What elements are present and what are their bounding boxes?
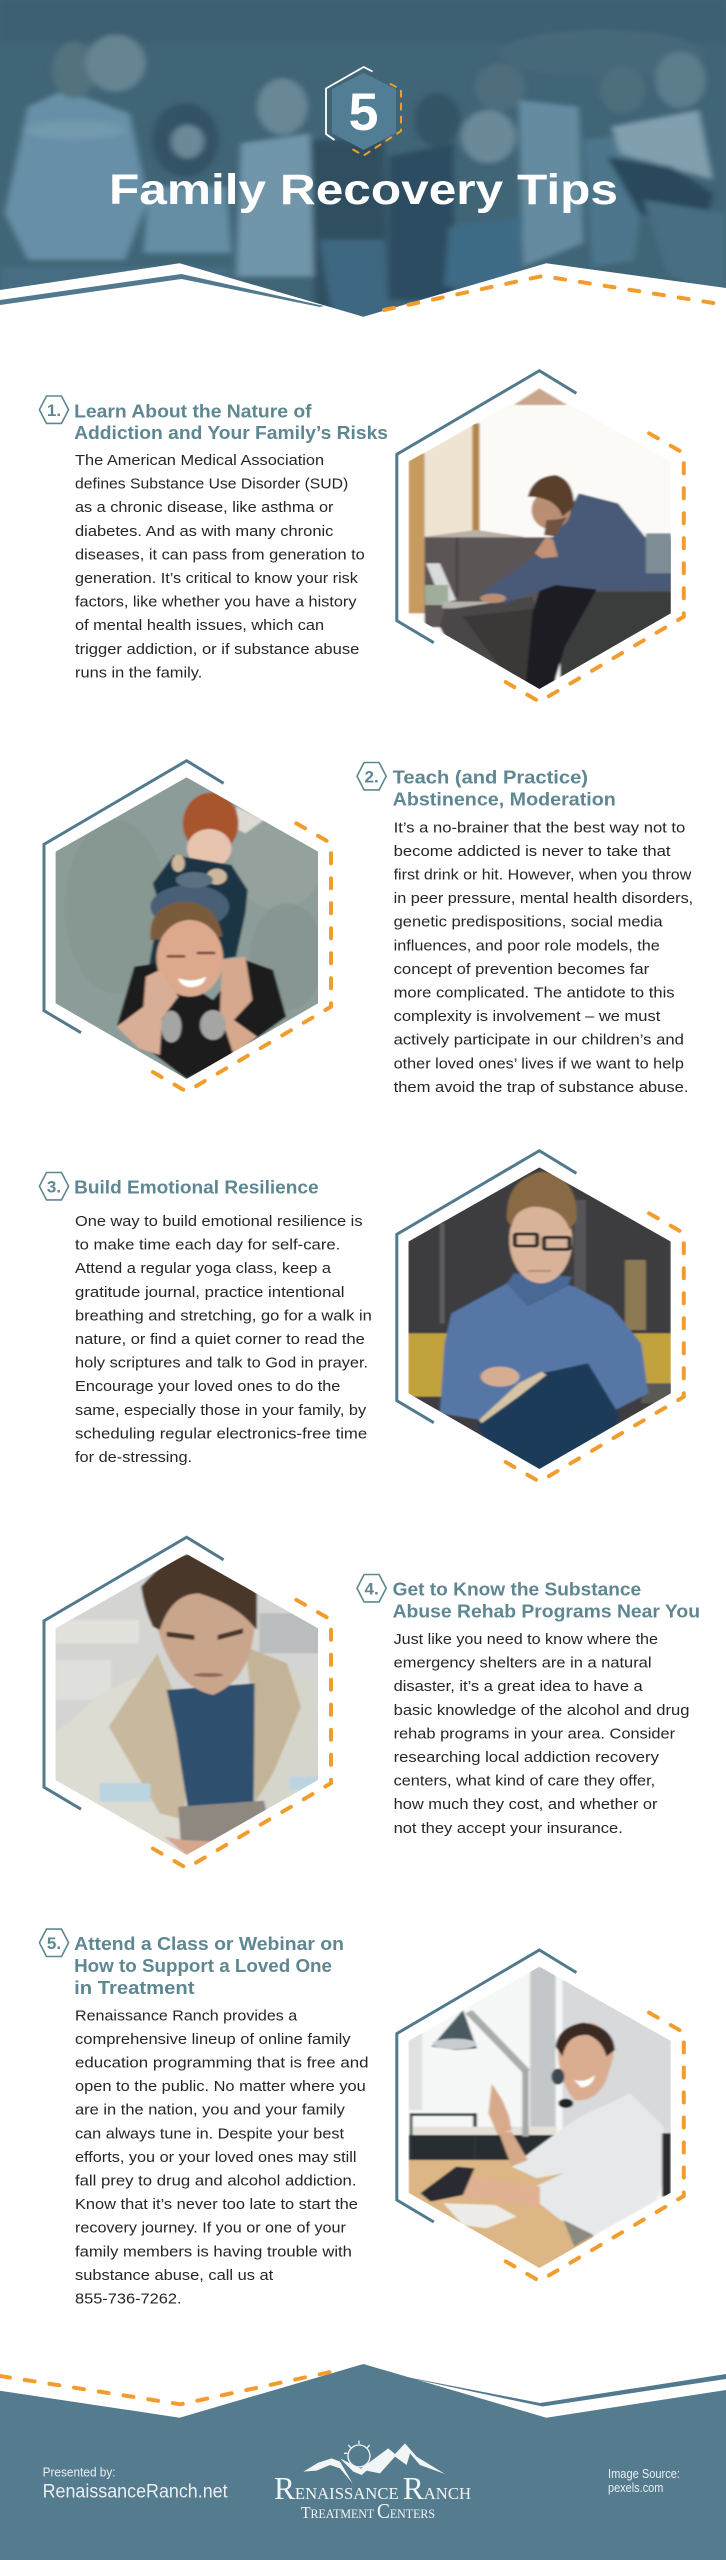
- text block: tip 2: actively participate in our children’s and: [394, 1032, 684, 1049]
- text block: tip 2: concept of prevention becomes far: [394, 961, 649, 978]
- heading: tip 4: Abuse Rehab Programs Near You: [393, 1601, 700, 1621]
- image source text: pexels.com: [608, 2481, 663, 2495]
- header photo of families: [0, 0, 726, 320]
- text block: tip 1: diabetes. And as with many chronic: [75, 523, 334, 540]
- text block: tip 1: The American Medical Association: [75, 452, 324, 469]
- text block: tip 1: defines Substance Use Disorder (SUD): [75, 476, 348, 493]
- heading: tip 2: [357, 762, 616, 809]
- text block: tip 5: education programming that is free and: [75, 2054, 368, 2072]
- heading: tip 4: Get to Know the Substance: [393, 1580, 641, 1600]
- heading: tip 2: Abstinence, Moderation: [393, 789, 616, 809]
- heading: tip 1: 1.: [47, 401, 61, 420]
- photo: man looking at tablet: [53, 1553, 322, 1857]
- hexagon outline: [397, 1151, 576, 1423]
- text block: tip 4: how much they cost, and whether or: [394, 1796, 658, 1813]
- text block: tip 2: influences, and poor role models, the: [394, 937, 660, 954]
- text block: tip 5: can always tune in. Despite your best: [75, 2125, 345, 2142]
- footer background: [0, 2364, 726, 2560]
- text block: tip 1: diseases, it can pass from generation to: [75, 546, 365, 563]
- text block: tip 2: first drink or hit. However, when you throw: [394, 866, 691, 884]
- title: Family Recovery Tips: [109, 166, 618, 214]
- text block: tip 4: [394, 1631, 690, 1837]
- heading: tip 3: 3.: [47, 1178, 61, 1196]
- heading: tip 5: 5.: [47, 1934, 61, 1953]
- text block: tip 2: It’s a no-brainer that the best way not to: [394, 819, 685, 836]
- text block: tip 3: Encourage your loved ones to do the: [75, 1378, 340, 1395]
- text block: tip 1: runs in the family.: [75, 664, 202, 681]
- dashed hexagon accent: [503, 433, 684, 702]
- text block: tip 1: trigger addiction, or if substance abuse: [75, 641, 359, 658]
- presented by text: [43, 2465, 228, 2503]
- panel: tip 1: [39, 371, 684, 702]
- text block: tip 4: researching local addiction recovery: [394, 1749, 659, 1766]
- text block: tip 5: [75, 2007, 368, 2308]
- photo: man with headset giving thumbs up: [407, 1965, 674, 2270]
- text block: tip 4: emergency shelters are in a natural: [394, 1655, 652, 1672]
- panel: tip 3: [39, 1151, 684, 1482]
- heading: tip 3: Build Emotional Resilience: [74, 1177, 319, 1197]
- text block: tip 4: basic knowledge of the alcohol and drug: [394, 1702, 690, 1719]
- icon: mountains and sun: [303, 2441, 445, 2483]
- heading: tip 1: Addiction and Your Family’s Risks: [74, 423, 388, 443]
- heading: tip 2: Teach (and Practice): [393, 767, 588, 787]
- dashed hexagon accent: [151, 823, 331, 1092]
- hexagon outline: [397, 371, 576, 643]
- text block: tip 3: to make time each day for self-care.: [75, 1237, 340, 1254]
- text block: tip 3: gratitude journal, practice intentional: [75, 1284, 344, 1301]
- text block: tip 3: scheduling regular electronics-free time: [75, 1425, 367, 1442]
- text block: tip 4: centers, what kind of care they offer,: [394, 1773, 655, 1790]
- text block: tip 3: nature, or find a quiet corner to read the: [75, 1331, 365, 1348]
- text block: tip 3: breathing and stretching, go for a walk in: [75, 1307, 372, 1324]
- image source text: Image Source:: [608, 2467, 680, 2481]
- hexagon outline: [44, 761, 224, 1033]
- text block: tip 3: holy scriptures and talk to God in prayer.: [75, 1355, 368, 1372]
- image source text: [608, 2467, 680, 2495]
- text block: tip 2: them avoid the trap of substance abuse.: [394, 1079, 688, 1096]
- text block: tip 3: for de-stressing.: [75, 1449, 192, 1466]
- text block: tip 2: genetic predispositions, social media: [394, 914, 663, 931]
- presented by text: Presented by:: [43, 2465, 116, 2480]
- text block: tip 4: Just like you need to know where the: [394, 1631, 658, 1648]
- text block: tip 5: substance abuse, call us at: [75, 2267, 274, 2284]
- dashed hexagon accent: [503, 2013, 684, 2281]
- text block: tip 5: recovery journey. If you or one of your: [75, 2220, 346, 2237]
- text block: tip 4: disaster, it’s a great idea to have a: [394, 1678, 643, 1695]
- heading: tip 1: [39, 396, 388, 443]
- text block: tip 1: generation. It’s critical to know your risk: [75, 570, 358, 587]
- text block: tip 5: open to the public. No matter where you: [75, 2078, 366, 2095]
- text block: tip 3: Attend a regular yoga class, keep a: [75, 1260, 332, 1277]
- text block: tip 4: rehab programs in your area. Consider: [394, 1725, 675, 1742]
- logo: Renaissance Ranch Treatment Centers: TREATMENT CENTERS: [301, 2499, 435, 2523]
- icon: number hexagon: 5: [348, 83, 378, 142]
- dashed hexagon accent: [151, 1600, 331, 1868]
- text block: tip 5: fall prey to drug and alcohol addiction.: [75, 2172, 356, 2190]
- hexagon outline: [397, 1950, 576, 2222]
- text block: tip 5: are in the nation, you and your family: [75, 2102, 345, 2119]
- text block: tip 5: efforts, you or your loved ones may still: [75, 2149, 356, 2166]
- heading: tip 5: in Treatment: [74, 1978, 194, 1998]
- text block: tip 2: other loved ones’ lives if we want to help: [394, 1055, 684, 1072]
- panel: tip 4: [44, 1537, 700, 1868]
- text block: tip 5: comprehensive lineup of online family: [75, 2031, 351, 2048]
- heading: tip 1: Learn About the Nature of: [74, 401, 313, 421]
- text block: tip 2: become addicted is never to take that: [394, 843, 671, 860]
- heading: tip 5: How to Support a Loved One: [74, 1956, 332, 1976]
- text block: tip 4: not they accept your insurance.: [394, 1820, 623, 1837]
- panel: tip 2: [44, 761, 693, 1096]
- text block: tip 2: more complicated. The antidote to this: [394, 984, 675, 1002]
- footer panel: [0, 2364, 726, 2560]
- panel: tip 5: [39, 1929, 684, 2308]
- header panel: [0, 0, 726, 345]
- heading: tip 4: 4.: [365, 1580, 379, 1598]
- heading: tip 2: 2.: [365, 768, 379, 786]
- hexagon outline: [44, 1537, 224, 1809]
- text block: tip 1: factors, like whether you have a history: [75, 594, 357, 611]
- photo: father carrying baby: [53, 777, 324, 1080]
- header chevron: [0, 263, 726, 345]
- text block: tip 5: 855-736-7262.: [75, 2290, 182, 2308]
- text block: tip 3: same, especially those in your family, by: [75, 1402, 367, 1419]
- heading: tip 4: [357, 1574, 700, 1621]
- logo: Renaissance Ranch Treatment Centers: [274, 2441, 471, 2523]
- heading: tip 5: Attend a Class or Webinar on: [74, 1934, 344, 1954]
- text block: tip 2: [394, 819, 693, 1096]
- text block: tip 1: [75, 452, 365, 681]
- heading: tip 5: [39, 1929, 344, 1998]
- text block: tip 5: Know that it’s never too late to start the: [75, 2196, 358, 2213]
- logo: Renaissance Ranch Treatment Centers: RENAISSANCE RANCH: [274, 2470, 471, 2506]
- text block: tip 5: family members is having trouble with: [75, 2243, 352, 2260]
- photo: man writing in notebook: [407, 1167, 674, 1470]
- icon: number hexagon: [326, 67, 401, 156]
- photo: man at laptop on sofa: [407, 387, 675, 693]
- text block: tip 5: Renaissance Ranch provides a: [75, 2007, 298, 2024]
- text block: tip 3: One way to build emotional resilience is: [75, 1213, 362, 1230]
- text block: tip 1: of mental health issues, which can: [75, 617, 324, 634]
- heading: tip 3: [39, 1172, 319, 1200]
- text block: tip 2: in peer pressure, mental health disorders,: [394, 890, 693, 907]
- dashed hexagon accent: [503, 1213, 684, 1482]
- footer orange dashed chevron: [0, 2369, 343, 2404]
- text block: tip 1: as a chronic disease, like asthma or: [75, 499, 333, 516]
- text block: tip 3: [75, 1213, 372, 1466]
- text block: tip 2: complexity is involvement – we must: [394, 1008, 661, 1025]
- footer blue chevron stripe: [406, 2374, 726, 2406]
- presented by text: RenaissanceRanch.net: [43, 2482, 228, 2503]
